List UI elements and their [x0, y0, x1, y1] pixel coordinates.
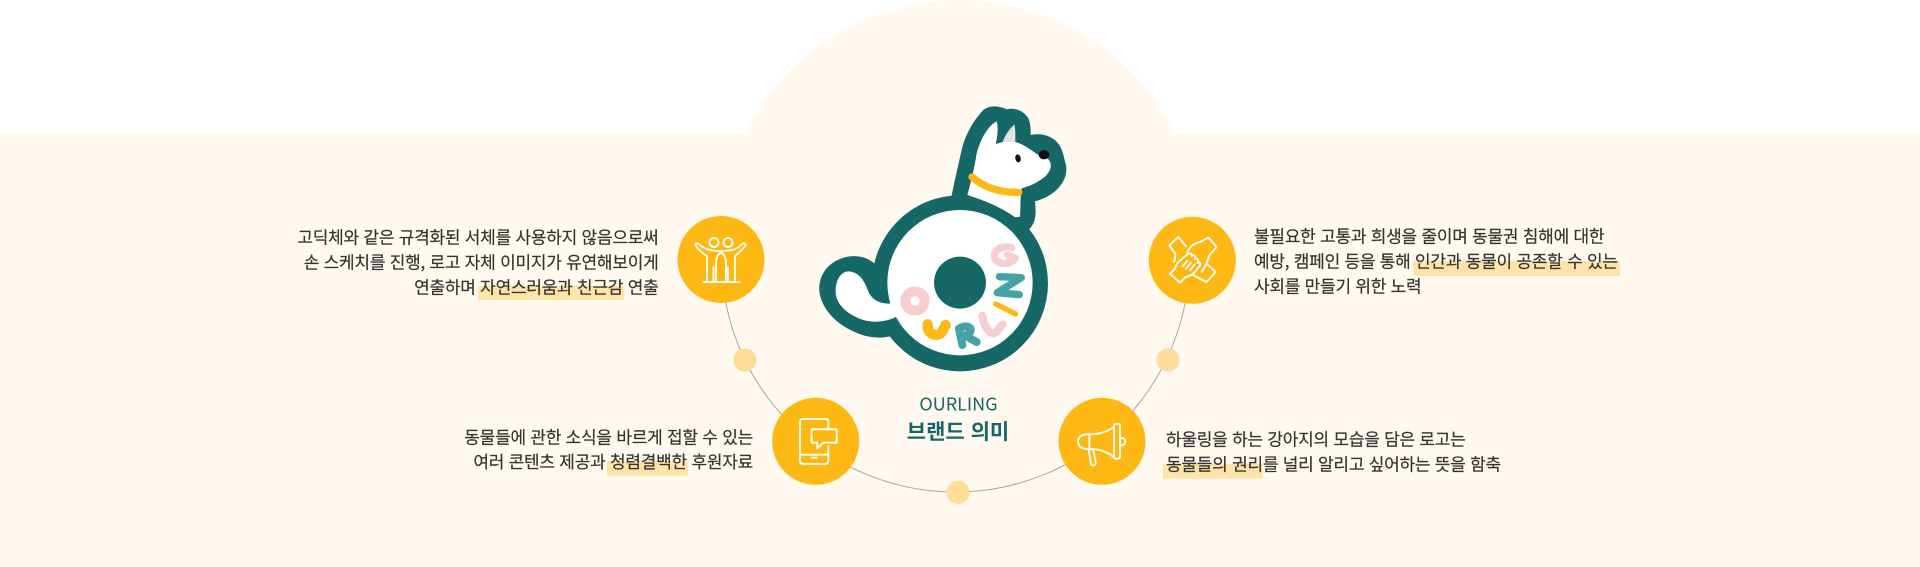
logo: nose	[1039, 150, 1049, 159]
arc dot: bottom	[946, 481, 970, 504]
highlight	[607, 461, 688, 476]
logo: letter G	[994, 247, 1015, 263]
highlight	[478, 286, 624, 300]
logo: outer ring	[872, 195, 1048, 371]
icon circle: people	[678, 216, 764, 303]
line 1: 고딕체와 같은 규격화된 서체를 사용하지 않음으로써	[297, 224, 658, 248]
logo: letter U	[928, 324, 946, 335]
line 1: 불필요한 고통과 희생을 줄이며 동물권 침해에 대한	[1254, 222, 1605, 248]
arc dot: right	[1156, 348, 1180, 372]
logo: teal silhouette	[819, 106, 1066, 338]
logo: white disc	[887, 210, 1033, 355]
highlight	[1413, 261, 1620, 276]
logo: dog mascot	[819, 106, 1066, 371]
icon circle: hands	[1149, 217, 1236, 304]
highlight	[1163, 464, 1263, 479]
text block: top left	[297, 224, 658, 300]
logo: white tail	[836, 271, 897, 322]
text block: bottom left	[464, 424, 753, 476]
icon: two people with raised arms	[695, 238, 746, 282]
line 3: 사회를 만들기 위한 노력	[1254, 272, 1421, 298]
logo: letter R	[959, 326, 977, 345]
line 3: 연출하며 자연스러움과 친근감 연출	[414, 274, 658, 298]
line 2: 예방, 캠페인 등을 통해 인간과 동물이 공존할 수 있는	[1254, 248, 1618, 272]
line 2: 손 스케치를 진행, 로고 자체 이미지가 유연해보이게	[304, 248, 658, 274]
logo: inner ear	[1003, 124, 1015, 142]
logo: collar	[972, 177, 1019, 192]
title: brand meaning: 브랜드 의미	[907, 416, 1009, 446]
icon: stacked hands	[1169, 237, 1217, 283]
arc dot: left	[733, 348, 757, 372]
title	[907, 390, 1009, 446]
line 1: 동물들에 관한 소식을 바르게 접할 수 있는	[464, 424, 753, 448]
line 2: 여러 콘텐츠 제공과 청렴결백한 후원자료	[473, 448, 753, 473]
line 1: 하울링을 하는 강아지의 모습을 담은 로고는	[1166, 426, 1466, 450]
icon: megaphone	[1078, 424, 1125, 466]
icon circle: phone	[772, 398, 859, 485]
logo: white body	[967, 121, 1051, 217]
logo: letter L	[982, 316, 1003, 333]
connecting arc	[722, 258, 1190, 492]
logo: letter I	[996, 304, 1016, 314]
text block: top right	[1254, 222, 1620, 298]
logo: letter O	[905, 291, 925, 311]
logo: eye	[1015, 154, 1021, 163]
icon circle: megaphone	[1058, 398, 1146, 485]
logo: centre dot	[934, 257, 986, 309]
line 2: 동물들의 권리를 널리 알리고 싶어하는 뜻을 함축	[1166, 450, 1501, 476]
logo: letter N	[997, 277, 1021, 295]
title: OURLING: OURLING	[919, 390, 998, 416]
text block: bottom right	[1163, 426, 1501, 479]
icon: phone with speech bubble	[800, 419, 837, 464]
